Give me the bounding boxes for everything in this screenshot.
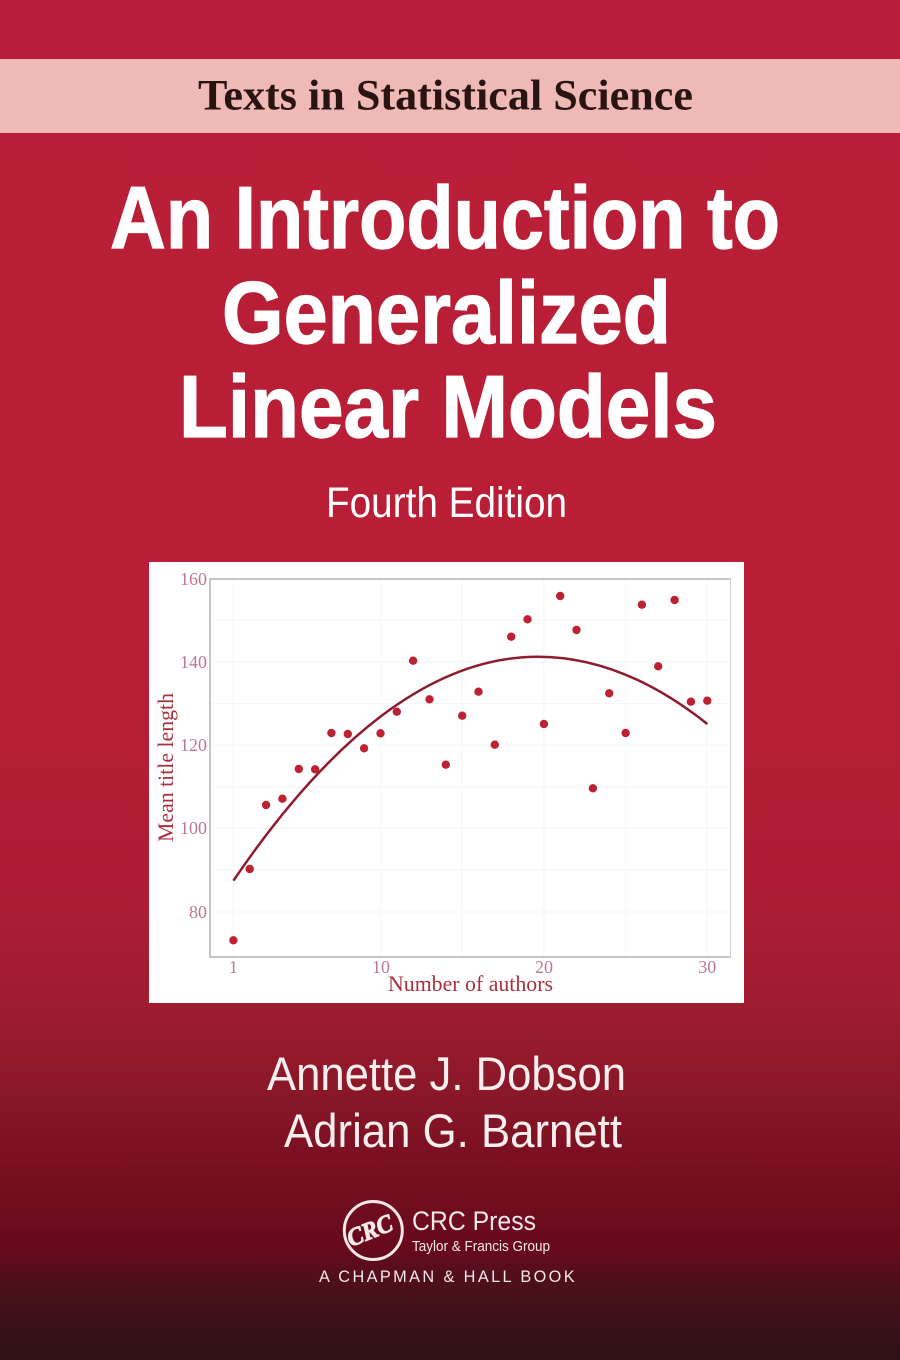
- title: Generalized: [222, 263, 671, 362]
- authors: Adrian G. Barnett: [284, 1104, 622, 1157]
- authors: Annette J. Dobson: [267, 1047, 626, 1100]
- edition: Fourth Edition: [326, 479, 567, 527]
- authors: [267, 1047, 626, 1157]
- scatter plot panel: [149, 562, 744, 1003]
- x axis tick labels: 20: [535, 957, 553, 977]
- x axis tick labels: 1: [229, 957, 238, 977]
- title: [110, 168, 780, 456]
- publisher logo: [319, 1202, 577, 1286]
- fitted curve: [233, 657, 707, 881]
- imprint line: A CHAPMAN & HALL BOOK: [319, 1267, 577, 1286]
- x axis tick labels: [229, 957, 716, 977]
- title: Linear Models: [179, 357, 717, 456]
- publisher name: CRC Press: [412, 1206, 536, 1236]
- data points: [229, 592, 711, 944]
- icon: CRC circle: CRC: [343, 1210, 397, 1253]
- grid lines: [210, 579, 730, 957]
- y axis title: Mean title length: [153, 693, 178, 842]
- series band: [0, 59, 900, 133]
- y axis tick labels: 140: [180, 652, 207, 672]
- y axis tick labels: 120: [180, 735, 207, 755]
- plot frame: [730, 579, 732, 957]
- title: An Introduction to: [110, 168, 780, 267]
- y axis tick labels: 100: [180, 818, 207, 838]
- y axis tick labels: 80: [189, 902, 207, 922]
- y axis tick labels: [180, 569, 207, 922]
- x axis title: Number of authors: [388, 971, 553, 996]
- y axis tick labels: 160: [180, 569, 207, 589]
- x axis tick labels: 10: [372, 957, 390, 977]
- x axis tick labels: 30: [698, 957, 716, 977]
- series band: Texts in Statistical Science: [198, 72, 693, 120]
- publisher group: Taylor & Francis Group: [412, 1239, 550, 1255]
